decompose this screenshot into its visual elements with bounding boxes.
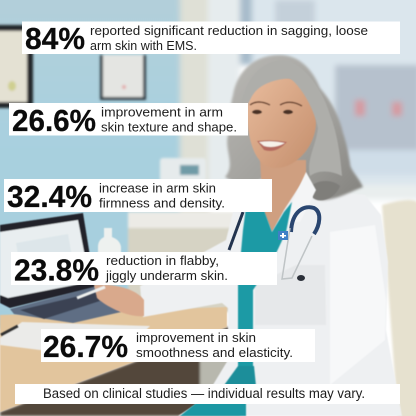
stat 5: 26.7%: 26.7% (43, 330, 128, 364)
chair (382, 200, 416, 416)
cabinet (128, 212, 240, 312)
stat 2: 26.6%: skin texture and shape. (101, 120, 237, 134)
stat 2: 26.6%: improvement in arm (101, 104, 223, 120)
stat 2: 26.6% (9, 103, 248, 138)
stat 2: 26.6%: 26.6% (12, 104, 96, 138)
under desk floor (0, 327, 240, 416)
background: clinic room (0, 0, 416, 330)
doctor: teal scrubs (180, 200, 292, 416)
stat 4: 23.8%: reduction in flabby, (106, 253, 219, 268)
stat 1: 84%: reported significant reduction in sagging, loose (90, 23, 368, 38)
papers and clipboard (0, 322, 150, 352)
doctor (77, 55, 402, 416)
framed certificate left (0, 25, 33, 108)
disclaimer banner: Based on clinical studies — individual results may vary. (43, 386, 365, 401)
wall device (160, 158, 206, 182)
desk (0, 307, 227, 412)
doctor: neck (260, 160, 306, 232)
doctor: hair back (225, 55, 363, 200)
hand sanitizer bottle (98, 228, 121, 255)
doctor: stethoscope (229, 207, 319, 281)
framed certificate centre (100, 55, 146, 100)
stat 1: 84%: arm skin with EMS. (90, 38, 197, 53)
stat 4: 23.8% (11, 252, 277, 288)
stat 3: 32.4% (4, 179, 272, 214)
laptop (0, 213, 121, 323)
stat 3: 32.4%: increase in arm skin (99, 180, 216, 196)
doctor: coat collar (283, 172, 316, 222)
stat 5: 26.7%: improvement in skin (136, 330, 256, 345)
stat 3: 32.4%: 32.4% (7, 180, 92, 214)
doctor: face (247, 78, 316, 168)
stat 1: 84%: 84% (25, 22, 85, 56)
stat 4: 23.8%: jiggly underarm skin. (105, 268, 228, 283)
doctor: white coat body (140, 178, 402, 416)
doctor: hand and pen (77, 285, 144, 316)
stat 3: 32.4%: firmness and density. (99, 196, 225, 210)
stat 5: 26.7% (41, 329, 315, 364)
disclaimer banner (15, 384, 400, 404)
stat 5: 26.7%: smoothness and elasticity. (136, 345, 293, 360)
stat 1: 84% (22, 22, 400, 56)
doctor: hair front (242, 60, 342, 200)
icon: coat badge (278, 231, 288, 240)
stat 4: 23.8%: 23.8% (14, 254, 99, 288)
